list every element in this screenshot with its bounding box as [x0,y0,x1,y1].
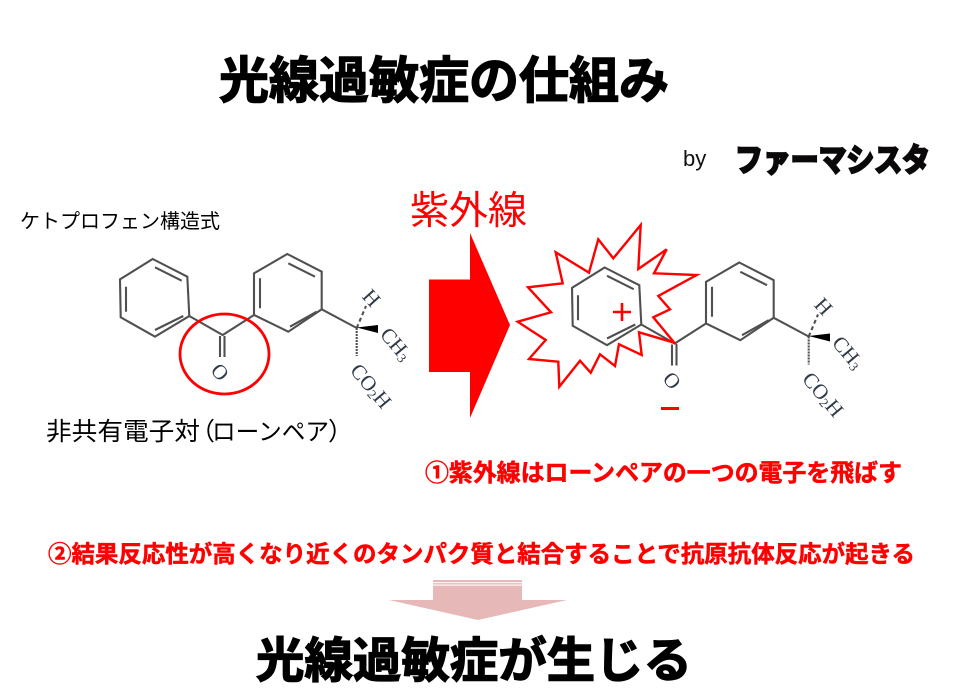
molecule: ketoprofen left: CO [345,359,383,397]
molecule: ketoprofen right: 3 [846,359,862,374]
molecule: ketoprofen left: H [358,284,385,312]
molecule: ketoprofen right: O [658,367,686,394]
arrow: UV red [429,233,510,418]
plus sign [613,303,631,321]
label: lone pair: （ [190,418,215,446]
molecule: ketoprofen left: H [368,386,397,413]
byline: by [683,146,706,171]
label: UV: 紫外線 [410,190,527,233]
molecule: ketoprofen left [120,254,417,413]
label: ketoprofen structure: ケトプロフェン構造式 [20,210,220,233]
title: 光線過敏症の仕組み [219,53,669,109]
minus sign [661,407,679,410]
molecule: ketoprofen right [572,262,869,422]
circle: carbonyl highlight [180,314,269,394]
molecule: ketoprofen right: CO [797,367,835,405]
logo: ファーマシスタ: ファーマシスタ [735,142,930,178]
molecule: ketoprofen right: H [810,293,837,320]
molecule: ketoprofen left: O [206,358,234,386]
label: lone pair: ） [328,418,353,446]
molecule: ketoprofen left: 3 [394,351,410,365]
molecule: ketoprofen left: CH [375,323,412,360]
arrow: pink down [389,580,567,620]
conclusion: 光線過敏症が生じる [256,635,692,688]
note 1: ①紫外線はローンペアの一つの電子を飛ばす [425,460,902,487]
molecule: ketoprofen right: H [820,395,849,422]
burst: explosion outline [518,225,697,387]
molecule: ketoprofen left: 2 [364,387,380,402]
label: lone pair: ローンペア [212,419,329,446]
label: lone pair: 非共有電子対 [46,418,200,446]
molecule: ketoprofen right: CH [827,331,864,369]
molecule: ketoprofen right: 2 [816,395,832,410]
note 2: ②結果反応性が高くなり近くのタンパク質と結合することで抗原抗体反応が起きる [48,540,915,567]
